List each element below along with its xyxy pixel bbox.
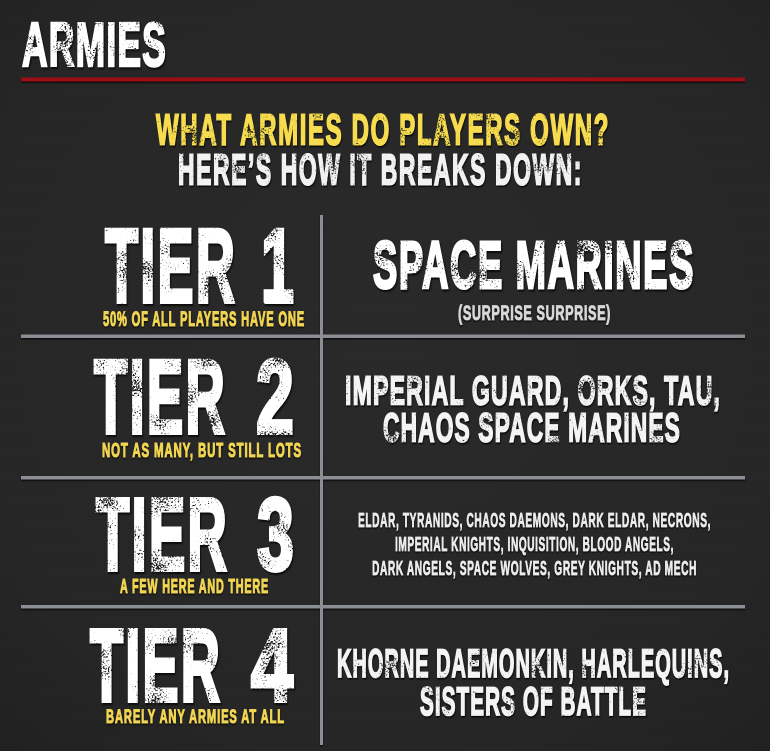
tier 4 caption: BARELY ANY ARMIES AT ALL — [106, 707, 285, 728]
tier 3 label: TIER — [96, 477, 229, 592]
tier 2 label: TIER — [94, 339, 227, 456]
tier 3 armies — [358, 510, 711, 580]
table dividers — [21, 215, 745, 745]
tier 3 row — [96, 477, 711, 598]
title rule — [21, 78, 745, 82]
tier 2 caption: NOT AS MANY, BUT STILL LOTS — [102, 440, 302, 462]
heading — [156, 106, 610, 194]
tier 1 note: (SURPRISE SURPRISE) — [458, 302, 611, 325]
tier 4 label: TIER — [90, 608, 222, 723]
tier 4 row — [90, 608, 730, 728]
tier 1 caption: 50% OF ALL PLAYERS HAVE ONE — [103, 308, 305, 331]
tier 3 label: 3 — [257, 477, 294, 592]
tier 1 label: 1 — [261, 208, 294, 325]
title: ARMIES — [22, 11, 167, 80]
tier 1 label: TIER — [105, 208, 237, 325]
tier 1 row — [103, 208, 695, 331]
tier 2 row — [94, 339, 721, 462]
tier 3 caption: A FEW HERE AND THERE — [120, 576, 269, 598]
tier 2 label: 2 — [256, 339, 294, 456]
tier 4 label: 4 — [251, 608, 293, 723]
